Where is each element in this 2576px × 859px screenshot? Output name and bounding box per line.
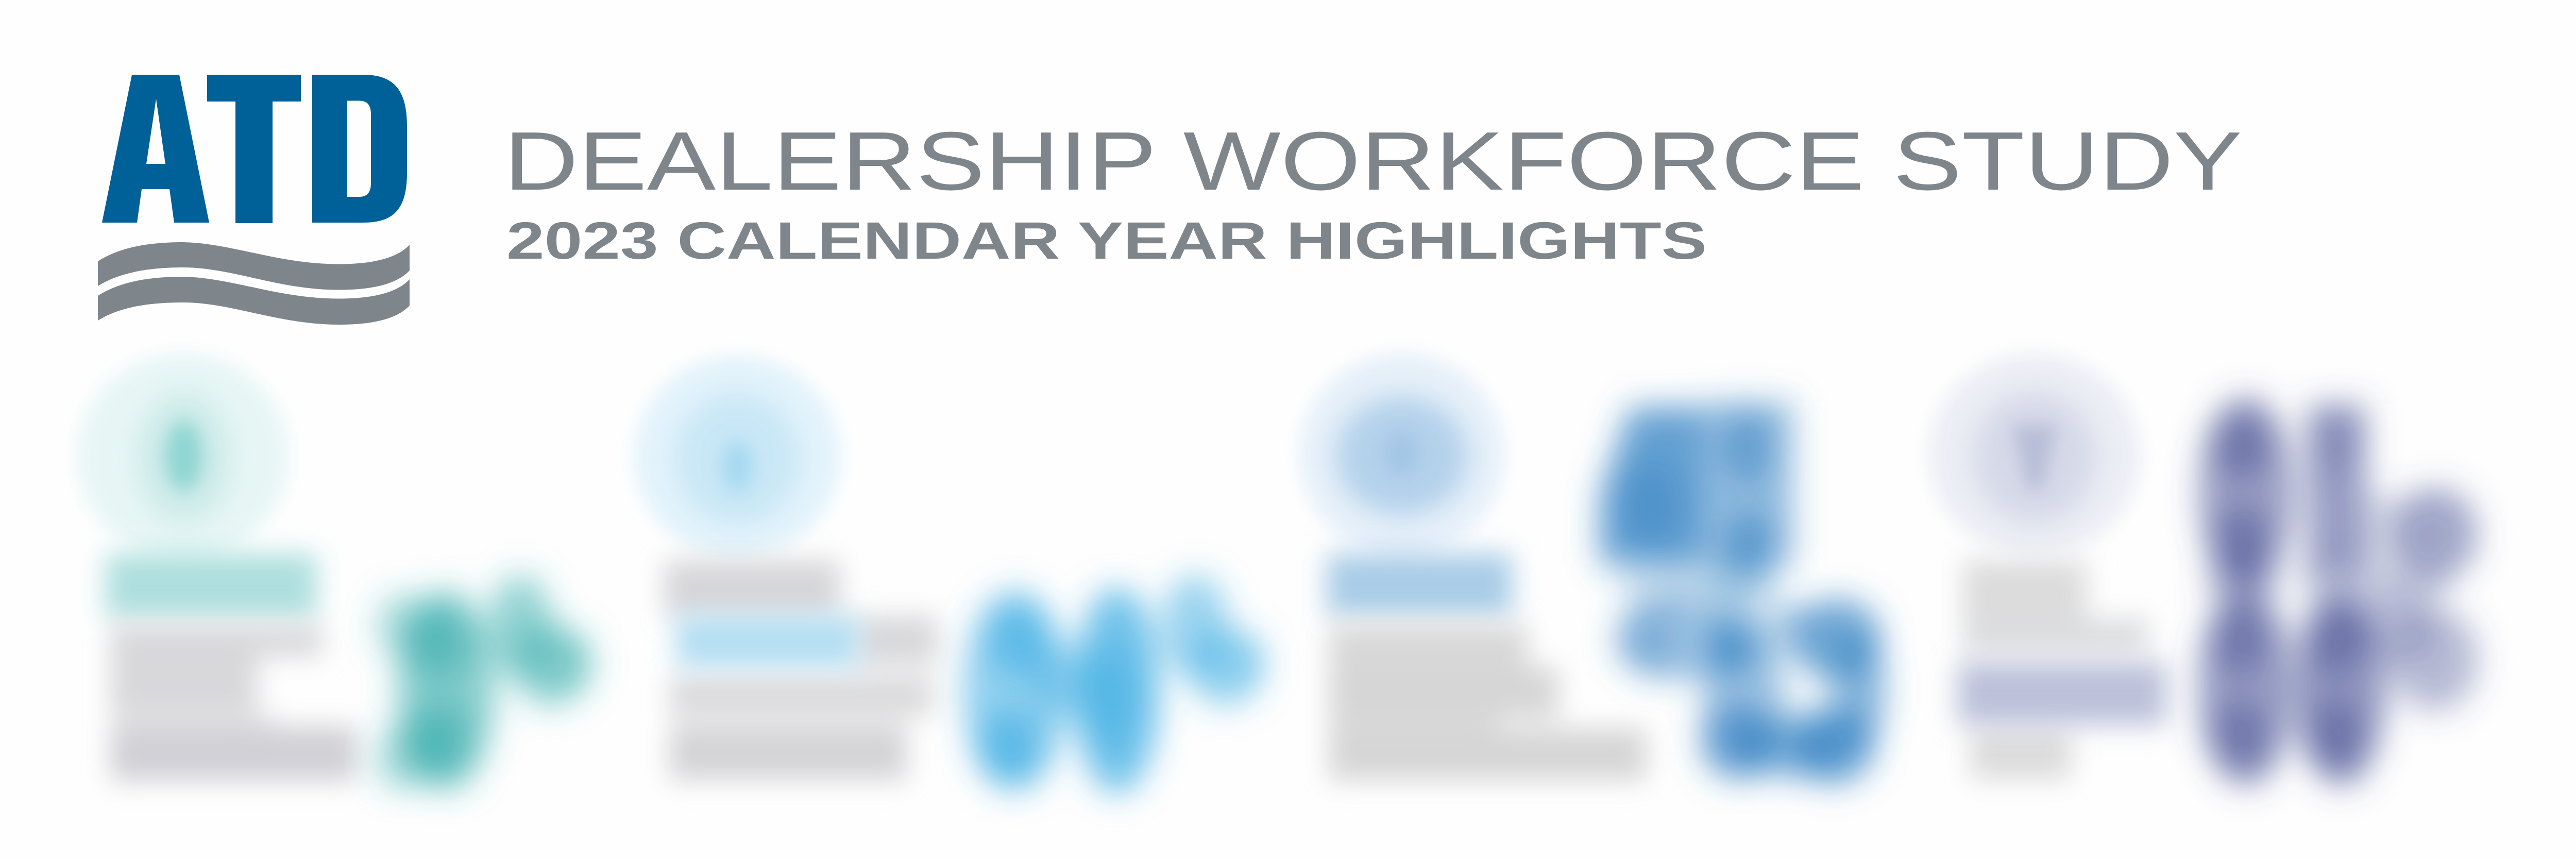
statistic figure [376, 575, 595, 791]
title: DEALERSHIP WORKFORCE STUDY [504, 115, 2242, 208]
logo letters [102, 75, 407, 223]
text block [665, 561, 938, 780]
subtitle: 2023 CALENDAR YEAR HIGHLIGHTS [506, 211, 1707, 270]
icon: navy circle [1929, 353, 2140, 555]
panel: light blue statistic (obscured) [634, 356, 1267, 794]
icon: light blue circle [634, 356, 840, 558]
highlighted text block [106, 554, 317, 618]
text block [1963, 561, 2148, 779]
panel: teal statistic (obscured) [77, 353, 595, 791]
statistic figure [963, 575, 1267, 794]
highlighted text block [1958, 662, 2166, 725]
text block [111, 625, 357, 781]
highlighted text block [1327, 554, 1512, 616]
logo: ATD [98, 75, 410, 325]
text block [1329, 625, 1646, 780]
statistic figure [2199, 397, 2478, 786]
panel: navy statistic (obscured) [1929, 353, 2478, 786]
highlighted text block [676, 616, 859, 667]
icon: mid blue circle [1300, 353, 1504, 555]
icon: teal circle [77, 353, 289, 559]
statistic figure [1600, 402, 1886, 783]
panel: mid blue statistic (obscured) [1300, 353, 1886, 783]
logo waves [98, 242, 410, 325]
